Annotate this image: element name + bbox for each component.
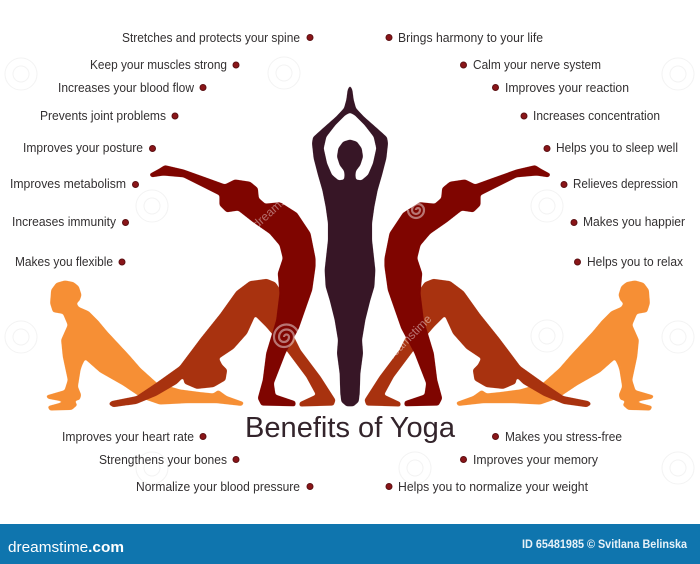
left benefits list: Increases immunity bbox=[12, 215, 117, 229]
figure: orange upward dog bbox=[47, 281, 243, 410]
right benefits list: Helps you to normalize your weight bbox=[398, 480, 589, 494]
left benefits list: Keep your muscles strong bbox=[90, 58, 227, 72]
left benefits list: Normalize your blood pressure bbox=[136, 480, 300, 494]
watermark rings bbox=[5, 57, 694, 484]
figure: deep red side bend bbox=[150, 166, 315, 406]
watermark spiral on left leg bbox=[274, 324, 299, 347]
right benefits list: Calm your nerve system bbox=[473, 58, 601, 72]
right benefits list: Makes you stress-free bbox=[505, 430, 622, 444]
right benefits list: Relieves depression bbox=[573, 177, 678, 191]
right benefits list: Increases concentration bbox=[533, 109, 660, 123]
figure: rust downward dog bbox=[109, 279, 335, 407]
left benefits list: Makes you flexible bbox=[15, 255, 113, 269]
footer logo: dreamstime.com bbox=[8, 539, 124, 556]
right benefits list bbox=[386, 31, 685, 494]
yoga figures, left side bbox=[47, 166, 335, 410]
right benefits list: Improves your reaction bbox=[505, 81, 629, 95]
figure: central standing prayer pose bbox=[312, 86, 388, 406]
left benefits list bbox=[10, 31, 313, 494]
right benefits list: Brings harmony to your life bbox=[398, 31, 543, 45]
right benefits list: Helps you to relax bbox=[587, 255, 684, 269]
footer credit: ID 65481985 © Svitlana Belinska bbox=[522, 537, 687, 551]
left benefits list: Improves your heart rate bbox=[62, 430, 194, 444]
watermark wordmark right: dreamstime bbox=[380, 312, 435, 366]
right benefits list: Improves your memory bbox=[473, 453, 599, 467]
left benefits list: Stretches and protects your spine bbox=[122, 31, 300, 45]
right benefits list: Makes you happier bbox=[583, 215, 685, 229]
title: Benefits of Yoga bbox=[245, 412, 456, 444]
yoga figures, right side (mirrored) bbox=[365, 166, 653, 410]
watermark spiral on right torso bbox=[408, 204, 424, 218]
left benefits list: Improves your posture bbox=[23, 141, 143, 155]
left benefits list: Prevents joint problems bbox=[40, 109, 166, 123]
right benefits list: Helps you to sleep well bbox=[556, 141, 678, 155]
left benefits list: Increases your blood flow bbox=[58, 81, 195, 95]
footer bar bbox=[0, 524, 700, 564]
watermark wordmark left: dreamstime bbox=[250, 179, 306, 231]
left benefits list: Improves metabolism bbox=[10, 177, 126, 191]
left benefits list: Strengthens your bones bbox=[99, 453, 227, 467]
